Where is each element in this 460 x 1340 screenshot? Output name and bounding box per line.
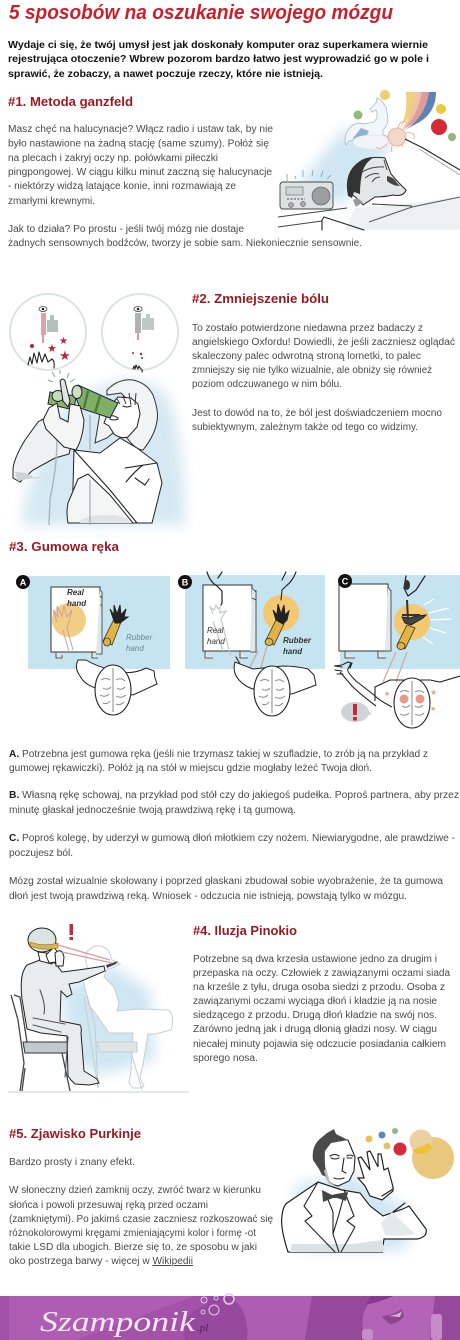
heading: #4: #4. Iluzja Pinokio bbox=[193, 923, 297, 938]
hair bbox=[107, 380, 158, 450]
text: section 3 bbox=[9, 749, 459, 902]
text: section 5: (zamkniętymi). Po jakimś czasie zaczniesz rozkoszować się bbox=[9, 1214, 273, 1225]
text: section 2: To zostało potwierdzone niedawna przez badaczy z bbox=[192, 323, 423, 334]
callout: exclamation bubble bbox=[341, 702, 372, 722]
cables bbox=[49, 415, 90, 525]
heading: #2: #2. Zmniejszenie bólu bbox=[192, 291, 329, 306]
text: section 4: siedzącego z przodu. Drugą dłoń kładzie na swój nos. bbox=[193, 1010, 437, 1021]
panel: rubber hand B: hand bbox=[283, 647, 303, 656]
bow tie bbox=[322, 1190, 348, 1202]
footer banner: .pl bbox=[197, 1322, 208, 1334]
illustration: Pinocchio illusion bbox=[8, 924, 189, 1093]
text: section 3: B. Własną rękę schowaj, na przykład pod stół czy do jakiegoś pudełka. Poproś partnera, aby przez bbox=[9, 790, 459, 801]
text: section 2 bbox=[192, 323, 455, 433]
illustration: man with radio hallucinating bbox=[278, 90, 460, 230]
icon: binoculars bbox=[48, 385, 118, 418]
icon: flying horse bbox=[345, 98, 389, 146]
icon: orange sketch face bbox=[376, 122, 414, 156]
text: section 4: Potrzebne są dwa krzesła ustawione jedno za drugim i bbox=[193, 954, 437, 965]
panel: rubber hand A: hand bbox=[67, 599, 87, 608]
text: section 4: przepaska na oczy. Człowiek z zawiązanymi oczami siada bbox=[193, 968, 450, 979]
text: section 4: zawiązanymi oczami wyciąga dłoń i kładzie ją na nosie bbox=[193, 996, 437, 1007]
text: section 1 bbox=[8, 124, 362, 249]
heading: #5: #5. Zjawisko Purkinje bbox=[9, 1126, 141, 1141]
icon: badge A: A bbox=[20, 578, 27, 588]
face bbox=[104, 397, 140, 438]
text: section 4: sporego nosa. bbox=[193, 1053, 258, 1064]
icon: circle with large view: ★ bbox=[47, 342, 57, 355]
icon: badge B: B bbox=[182, 578, 189, 588]
illustration: Purkinje portrait bbox=[282, 1128, 454, 1252]
icon: chair bbox=[11, 995, 70, 1091]
text: section 5: takie LSD dla ubogich. Bierze się to, ze sposobu w jaki bbox=[9, 1242, 257, 1253]
icon: arms and head with brain C: ★ bbox=[430, 705, 436, 713]
text: section 1: Jak to działa? Po prostu - jeśli twój mózg nie dostaje bbox=[8, 224, 244, 235]
panel: rubber hand A: hand bbox=[126, 644, 144, 653]
text: section 4: na krześle z tyłu, druga osoba siedzi z przodu. Osoba z bbox=[193, 982, 445, 993]
intro text: rejestrująca otoczenie? Wbrew pozorom bardzo łatwo jest wyprowadzić go w pole i bbox=[8, 54, 429, 65]
icon: sight lines bbox=[58, 945, 112, 963]
text: section 2: subiektywnym, zależnym także od tego co widzimy. bbox=[192, 422, 418, 433]
icon: circle with large view: ★ bbox=[59, 336, 68, 347]
pillow and body bbox=[385, 140, 460, 208]
text: section 3: poczujesz ból. bbox=[9, 848, 73, 859]
intro text bbox=[8, 40, 429, 80]
text: section 1: było nastawione na żadną stację (same szumy). Połóż się bbox=[8, 138, 269, 150]
text: section 5: różnokolorowymi kręgami zmieniającymi kolor i formę -ot bbox=[9, 1228, 256, 1239]
title: 5 sposobów na oszukanie swojego mózgu bbox=[9, 2, 393, 24]
text: section 5 bbox=[9, 1157, 273, 1267]
icon: circle with large view bbox=[10, 294, 86, 370]
text: section 2: angielskiego Oxfordu! Dowiedli, że jeśli zaczniesz oglądać bbox=[192, 337, 455, 348]
heading: #3: #3. Gumowa ręka bbox=[9, 539, 120, 554]
icon: rubber hand with hammer bbox=[397, 576, 426, 650]
bubbles bbox=[201, 1294, 234, 1315]
torso bbox=[72, 438, 162, 523]
face bbox=[321, 1140, 355, 1186]
icon: arms and head with brain C: ★ bbox=[384, 690, 390, 698]
panel: rubber hand C bbox=[334, 574, 460, 728]
man sitting bbox=[21, 928, 118, 1085]
woman sitting (pale) bbox=[83, 946, 173, 1090]
text: section 4: niecałej minuty pojawia się odczucie posiadania całkiem bbox=[193, 1039, 446, 1050]
text: section 3: gumowej rękawiczki). Połóż ją na stół w miejscu gdzie mogłaby leżeć Twoja dłoń. bbox=[9, 763, 372, 774]
hand bbox=[358, 1151, 393, 1200]
text: section 1: Masz chęć na halucynacje? Włącz radio i ustaw tak, by nie bbox=[8, 124, 273, 135]
text: section 3: dłoń jest twoją prawdziwą reką. Wniosek - odczucia nie istnieją, powstają tylko w mózgu. bbox=[9, 891, 407, 902]
panel: rubber hand A: Rubber bbox=[126, 633, 153, 642]
text: section 1: - niektórzy widzą latające konie, inni rozmawiają ze bbox=[8, 181, 236, 192]
heading: #1: #1. Metoda ganzfeld bbox=[8, 94, 133, 109]
icon: circle with small view bbox=[102, 294, 178, 372]
text: section 5: Bardzo prosty i znany efekt. bbox=[9, 1157, 135, 1168]
text: section 3: C. Poproś kolegę, by uderzył w gumową dłoń młotkiem czy nożem. Niewiarygodne, ale prawdziwe - bbox=[9, 833, 455, 844]
icon: badge C bbox=[338, 574, 352, 588]
text: section 2: zmniejszy się nie tylko wizualnie, ale obniży się również bbox=[192, 365, 432, 376]
text: section 3: Mózg został wizualnie skołowany i poprzed głaskani zbudował sobie wyobrażenie, że ta gumowa bbox=[9, 876, 443, 887]
intro text: Wydaje ci się, że twój umysł jest jak doskonały komputer oraz superkamera wiernie bbox=[8, 40, 428, 51]
icon: rainbow bbox=[400, 92, 436, 132]
icon: arms and head with brain C bbox=[334, 662, 460, 728]
text: section 1: pingpongowej. W ciągu kilku minut zaczną się halucynacje bbox=[8, 167, 272, 178]
icon: badge B bbox=[178, 575, 192, 589]
logo: Szamponik bbox=[40, 1306, 196, 1338]
earrings bbox=[431, 1314, 442, 1340]
icon: head with brain B bbox=[234, 657, 316, 716]
illustration: woman with binoculars bbox=[10, 294, 185, 525]
text: section 2: skaleczony palec odwrotną stroną lornetki, to palec bbox=[192, 351, 421, 362]
text: section 1: na plecach i zakryj oczy np. połówkami piłeczki bbox=[8, 153, 218, 164]
icon: badge A bbox=[16, 575, 30, 589]
panel: rubber hand B: Rubber bbox=[283, 636, 312, 645]
icon: man's head bbox=[347, 157, 412, 207]
icon: badge C: C bbox=[342, 576, 349, 586]
icon: head with brain A bbox=[76, 660, 157, 715]
text: section 1: żadnych sensownych bodźców, tworzy je sobie sam. Niekoniecznie sensownie. bbox=[8, 238, 362, 249]
icon: coloured circles bbox=[366, 1128, 454, 1179]
jacket bbox=[282, 1182, 426, 1252]
panel: rubber hand A: Real bbox=[67, 588, 85, 597]
footer banner bbox=[0, 1294, 460, 1340]
text: section 5: słońca i powoli przesuwaj ręką przed oczami bbox=[9, 1200, 208, 1211]
text: section 4 bbox=[193, 954, 450, 1064]
text: section 3: minutę głaskał jednocześnie twoją prawdziwą rękę i tą gumową. bbox=[9, 805, 296, 816]
text: section 1: zmarłymi krewnymi. bbox=[8, 196, 95, 207]
panel: rubber hand B bbox=[178, 572, 325, 716]
panel: rubber hand B: hand bbox=[207, 637, 225, 646]
icon: arms and head with brain C: ★ bbox=[430, 688, 437, 697]
hands and finger bbox=[43, 403, 84, 450]
text: section 2: Jest to dowód na to, że ból jest doświadczeniem mocno bbox=[192, 408, 442, 419]
panel: rubber hand B: Real bbox=[207, 626, 224, 635]
icon: circle with large view: ★ bbox=[59, 349, 71, 364]
left arm bbox=[13, 419, 72, 482]
icon: rubber hand bbox=[103, 605, 128, 646]
text: section 5: W słoneczny dzień zamknij oczy, zwróć twarz w kierunku bbox=[9, 1185, 261, 1196]
icon: radio bbox=[280, 170, 333, 209]
text: section 5: oko postrzega barwy - więcej w Wikipedii bbox=[9, 1256, 193, 1267]
panel: rubber hand A bbox=[16, 575, 170, 715]
text: section 3: A. Potrzebna jest gumowa ręka (jeśli nie trzymasz takiej w szufladzie, to zrób ją na przykład z bbox=[9, 749, 428, 760]
woman's face bbox=[362, 1296, 435, 1340]
intro text: sprawić, że zobaczy, a nawet poczuje rzeczy, które nie istnieją. bbox=[8, 69, 323, 80]
icon: exclamation mark bbox=[70, 924, 73, 940]
text: section 2: poziom odczuwanego w nim bólu. bbox=[192, 379, 342, 390]
icon: rubber hand B bbox=[265, 604, 289, 646]
text: section 4: Zarówno jedną jak i drugą dłonią gładzi nosy. W ciągu bbox=[193, 1024, 437, 1035]
